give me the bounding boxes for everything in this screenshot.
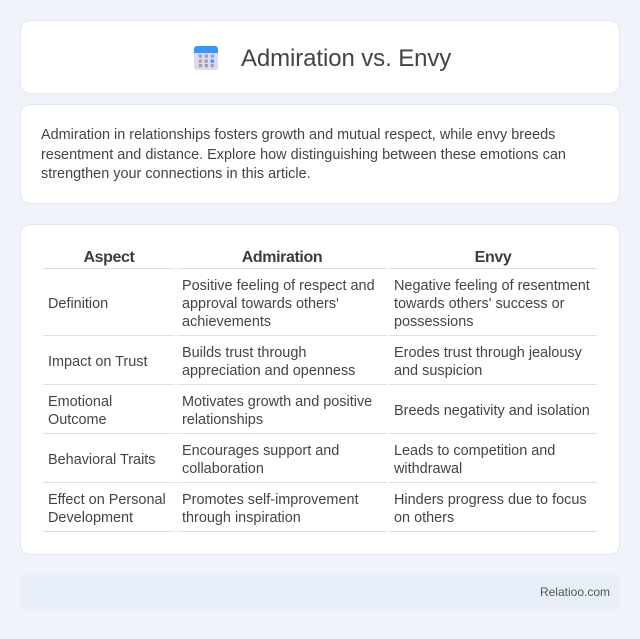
column heading: Envy: Envy (475, 249, 511, 266)
row: Impact on Trust: appreciation and openness (182, 363, 355, 379)
row: Emotional Outcome: Emotional (48, 394, 112, 410)
row: Impact on Trust: Builds trust through (182, 345, 306, 361)
row: Impact on Trust: Erodes trust through jealousy (394, 345, 582, 361)
row: Definition: Positive feeling of respect and (182, 278, 375, 294)
row: Effect on Personal Development: through inspiration (182, 510, 301, 526)
row: Behavioral Traits: collaboration (182, 461, 264, 477)
row: Effect on Personal Development: Hinders progress due to focus (394, 492, 587, 508)
row: Emotional Outcome: Breeds negativity and isolation (394, 403, 590, 419)
footer credit: Relatioo.com (540, 585, 610, 599)
row: Behavioral Traits: Behavioral Traits (48, 452, 156, 468)
column heading: Aspect: Aspect (84, 249, 134, 266)
title: Admiration vs. Envy (241, 45, 451, 72)
intro text: strengthen your connections in this article. (41, 166, 311, 182)
intro panel (20, 104, 620, 204)
row: Impact on Trust: and suspicion (394, 363, 482, 379)
intro text: resentment and distance. Explore how distinguishing between these emotions can (41, 146, 566, 162)
row: Effect on Personal Development: Effect on Personal (48, 492, 166, 508)
row: Effect on Personal Development: on others (394, 510, 454, 526)
row: Definition: Definition (48, 296, 108, 312)
row: Impact on Trust: Impact on Trust (48, 354, 148, 370)
row: Definition: achievements (182, 314, 271, 330)
row: Emotional Outcome: Motivates growth and positive (182, 394, 372, 410)
intro text: Admiration in relationships fosters growth and mutual respect, while envy breeds (41, 127, 555, 143)
row: Definition: towards others' success or (394, 296, 564, 312)
row: Emotional Outcome: relationships (182, 412, 263, 428)
row: Effect on Personal Development: Promotes self-improvement (182, 492, 359, 508)
row: Behavioral Traits: Encourages support and (182, 443, 339, 459)
header panel (20, 20, 620, 94)
row: Definition: possessions (394, 314, 473, 330)
row: Emotional Outcome: Outcome (48, 412, 107, 428)
row: Behavioral Traits: withdrawal (394, 461, 462, 477)
row: Behavioral Traits: Leads to competition and (394, 443, 555, 459)
row: Definition: Negative feeling of resentment (394, 278, 590, 294)
icon: calendar (194, 46, 218, 70)
row: Definition: approval towards others' (182, 296, 339, 312)
intro text (41, 127, 566, 182)
table panel (20, 224, 620, 555)
footer bar (20, 575, 620, 609)
row: Effect on Personal Development: Development (48, 510, 133, 526)
column heading: Admiration: Admiration (242, 249, 322, 266)
